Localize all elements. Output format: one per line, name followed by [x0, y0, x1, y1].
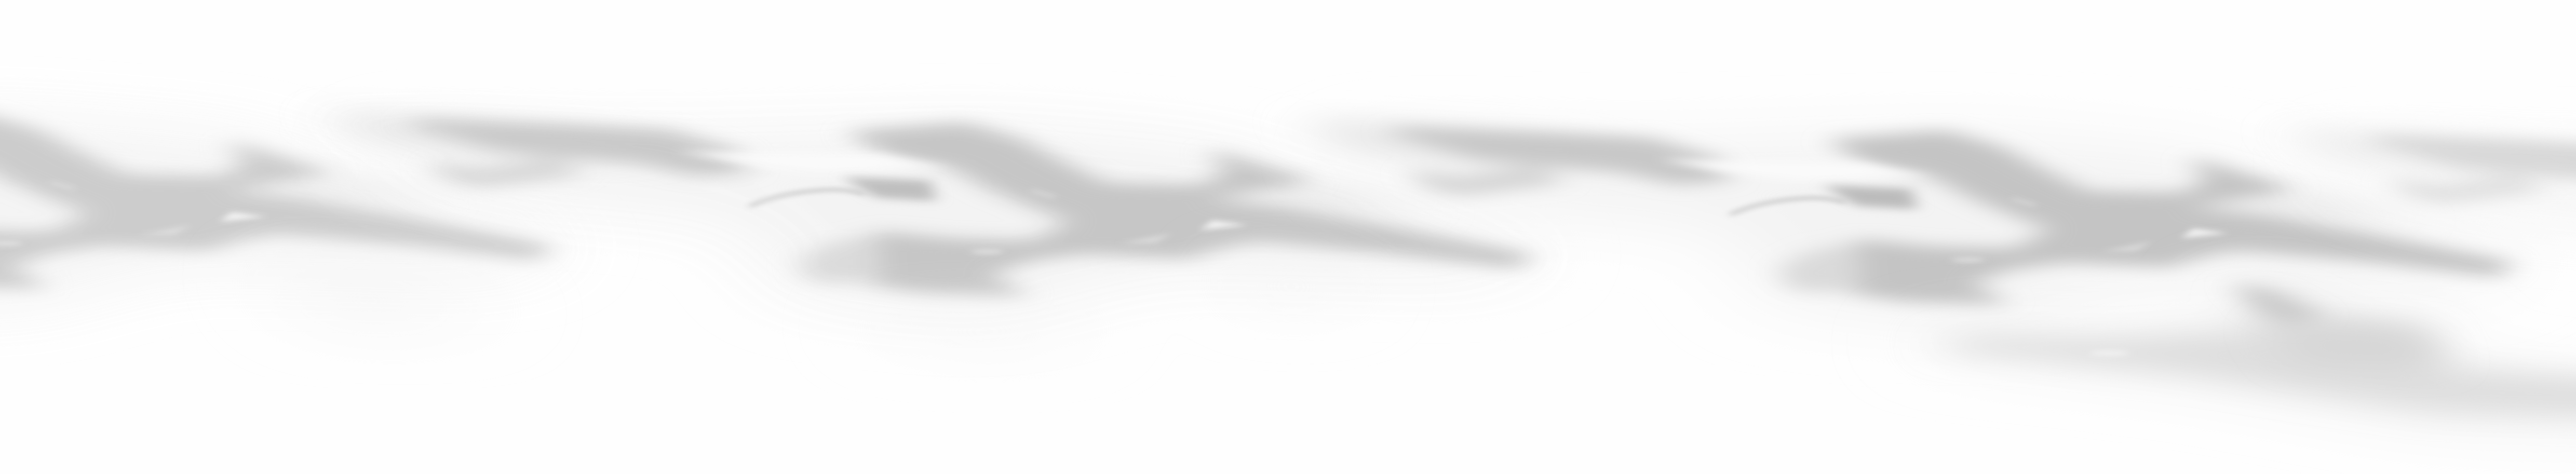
- faint lower-left haze: [279, 263, 1331, 345]
- smoke motif, far-left repeat: [0, 102, 552, 309]
- smoke motif, left repeat: [317, 110, 1533, 317]
- smoke motif, right repeat: [2278, 127, 2576, 333]
- lower-right smoke drift: [1928, 282, 2576, 430]
- smoke motif, centre repeat: [1298, 118, 2514, 325]
